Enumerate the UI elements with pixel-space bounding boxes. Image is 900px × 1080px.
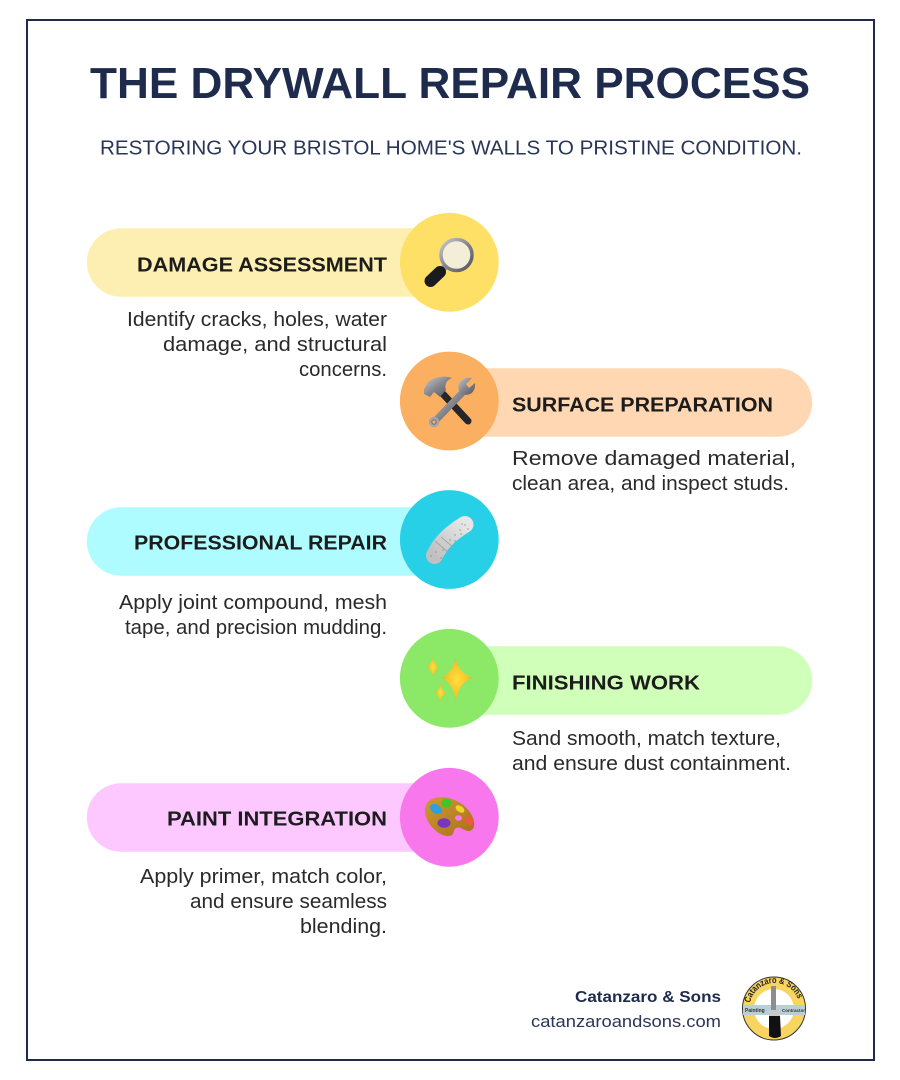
pill: finishing work	[460, 646, 812, 715]
pill: surface preparation	[460, 368, 812, 437]
description: finishing work: Sand smooth, match texture,	[512, 727, 781, 750]
pill: damage assessment	[87, 228, 440, 297]
website: catanzaroandsons.com	[531, 1013, 721, 1031]
step 1: damage assessment	[87, 213, 499, 381]
description: professional repair: tape, and precision mudding.	[125, 616, 387, 639]
description: surface preparation: Remove damaged material,	[512, 447, 796, 470]
description: professional repair	[119, 591, 387, 639]
heading: paint integration: PAINT INTEGRATION	[167, 808, 387, 831]
description: damage assessment: damage, and structural	[163, 333, 387, 356]
icon circle: adhesive bandage	[400, 490, 499, 589]
step 3: professional repair	[87, 490, 499, 639]
pill: professional repair	[87, 507, 440, 576]
company name: Catanzaro & Sons	[575, 989, 721, 1006]
logo: Catanzaro & Sons	[744, 978, 802, 1002]
title: THE DRYWALL REPAIR PROCESS	[90, 59, 810, 108]
description: damage assessment: Identify cracks, holes, water	[127, 308, 387, 331]
description: professional repair: Apply joint compound, mesh	[119, 591, 387, 614]
step 5: paint integration	[87, 768, 499, 938]
heading: finishing work: FINISHING WORK	[512, 672, 700, 695]
description: paint integration: Apply primer, match color,	[140, 865, 387, 888]
step 2: surface preparation	[400, 352, 812, 495]
step 4: finishing work	[400, 629, 812, 775]
subtitle: RESTORING YOUR BRISTOL HOME'S WALLS TO PRISTINE CONDITION.	[100, 136, 802, 160]
description: finishing work	[512, 727, 791, 775]
footer brand	[531, 976, 806, 1040]
description: paint integration: blending.	[300, 915, 387, 938]
heading: surface preparation: SURFACE PREPARATION	[512, 394, 773, 417]
pill: paint integration	[87, 783, 440, 852]
description: finishing work: and ensure dust containment.	[512, 752, 791, 775]
heading: damage assessment: DAMAGE ASSESSMENT	[137, 254, 387, 277]
logo	[742, 976, 806, 1040]
heading: professional repair: PROFESSIONAL REPAIR	[134, 532, 387, 555]
icon circle: magnifying glass	[400, 213, 499, 312]
description: surface preparation: clean area, and inspect studs.	[512, 472, 789, 495]
description: surface preparation	[512, 447, 796, 495]
description: damage assessment	[127, 308, 387, 381]
logo: Painting	[745, 1008, 765, 1014]
icon circle: sparkles	[400, 629, 499, 728]
icon circle: artist palette	[400, 768, 499, 867]
logo: Contractor	[782, 1008, 805, 1013]
description: paint integration	[140, 865, 387, 938]
description: damage assessment: concerns.	[299, 358, 387, 381]
description: paint integration: and ensure seamless	[190, 890, 387, 913]
icon circle: hammer and wrench	[400, 352, 499, 450]
